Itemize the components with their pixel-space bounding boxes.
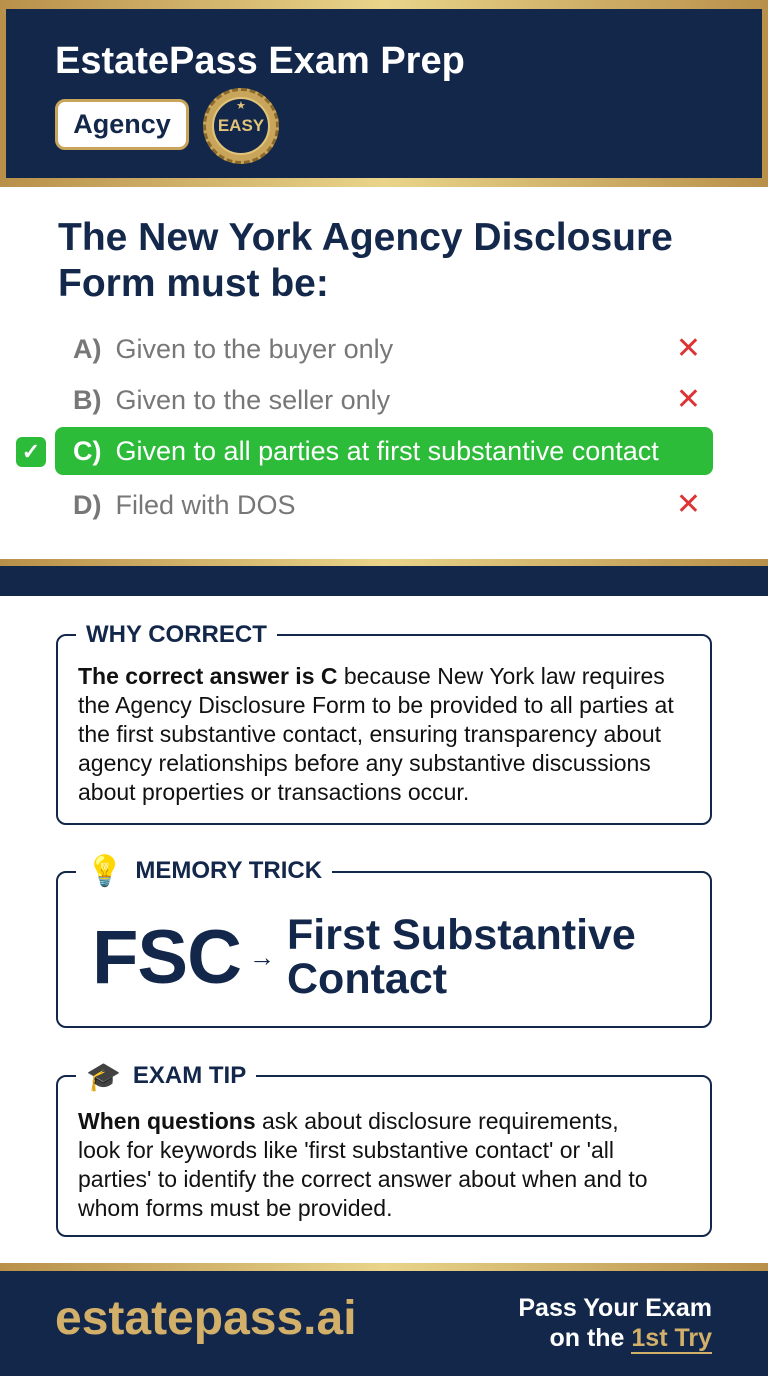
option D	[73, 488, 701, 521]
option B: B) Given to the seller only	[73, 385, 390, 415]
option B	[73, 383, 701, 416]
option C correct	[55, 427, 713, 475]
option D: ✕	[676, 488, 701, 521]
difficulty badge: EASY	[218, 116, 264, 135]
panel: memory trick	[56, 871, 712, 1028]
icon: check	[16, 437, 46, 467]
panel: why correct	[56, 634, 712, 825]
answer options	[16, 332, 713, 521]
option A: ✕	[676, 332, 701, 365]
icon: check: ✓	[22, 439, 40, 464]
heading: MEMORY TRICK	[135, 857, 322, 884]
question: The New York Agency Disclosure	[58, 216, 673, 259]
difficulty badge	[203, 88, 279, 164]
footer brand: estatepass.ai	[55, 1292, 357, 1345]
mnemonic: Contact	[287, 955, 447, 1003]
mnemonic	[92, 911, 636, 1003]
option D: D) Filed with DOS	[73, 490, 296, 520]
option A	[73, 332, 701, 365]
text block: When questions ask about disclosure requirements, look for keywords like 'first substantive contact' or 'all parties' to identify the correct answer about when and to whom forms must be provided.	[78, 1108, 648, 1221]
heading: WHY CORRECT	[86, 621, 267, 648]
header panel	[0, 0, 768, 187]
difficulty badge: ★	[236, 100, 246, 112]
heading: EXAM TIP	[133, 1062, 246, 1089]
text block: The correct answer is C because New York law requires the Agency Disclosure Form to be provided to all parties at the first substantive contact, ensuring transparency about agency relationships before any substantive discussions about properties or transactions occur.	[78, 663, 674, 805]
mnemonic: FSC	[92, 914, 241, 1000]
option B: ✕	[676, 383, 701, 416]
option C correct: C) Given to all parties at first substantive contact	[73, 436, 659, 466]
option A: A) Given to the buyer only	[73, 334, 393, 364]
footer	[0, 1263, 768, 1376]
panel: exam tip	[56, 1075, 712, 1237]
question: Form must be:	[58, 262, 329, 305]
mnemonic: First Substantive	[287, 911, 636, 959]
footer tagline: on the 1st Try	[549, 1324, 712, 1352]
heading	[76, 851, 332, 891]
footer tagline: Pass Your Exam	[518, 1294, 712, 1322]
title: EstatePass Exam Prep	[55, 40, 465, 82]
heading	[76, 1057, 256, 1095]
heading: 🎓	[86, 1060, 121, 1092]
footer tagline	[518, 1294, 712, 1354]
category badge: Agency	[73, 109, 171, 139]
question	[58, 216, 673, 305]
heading: 💡	[86, 854, 123, 888]
divider band	[0, 559, 768, 596]
mnemonic: →	[249, 942, 275, 972]
category badge	[55, 99, 189, 150]
